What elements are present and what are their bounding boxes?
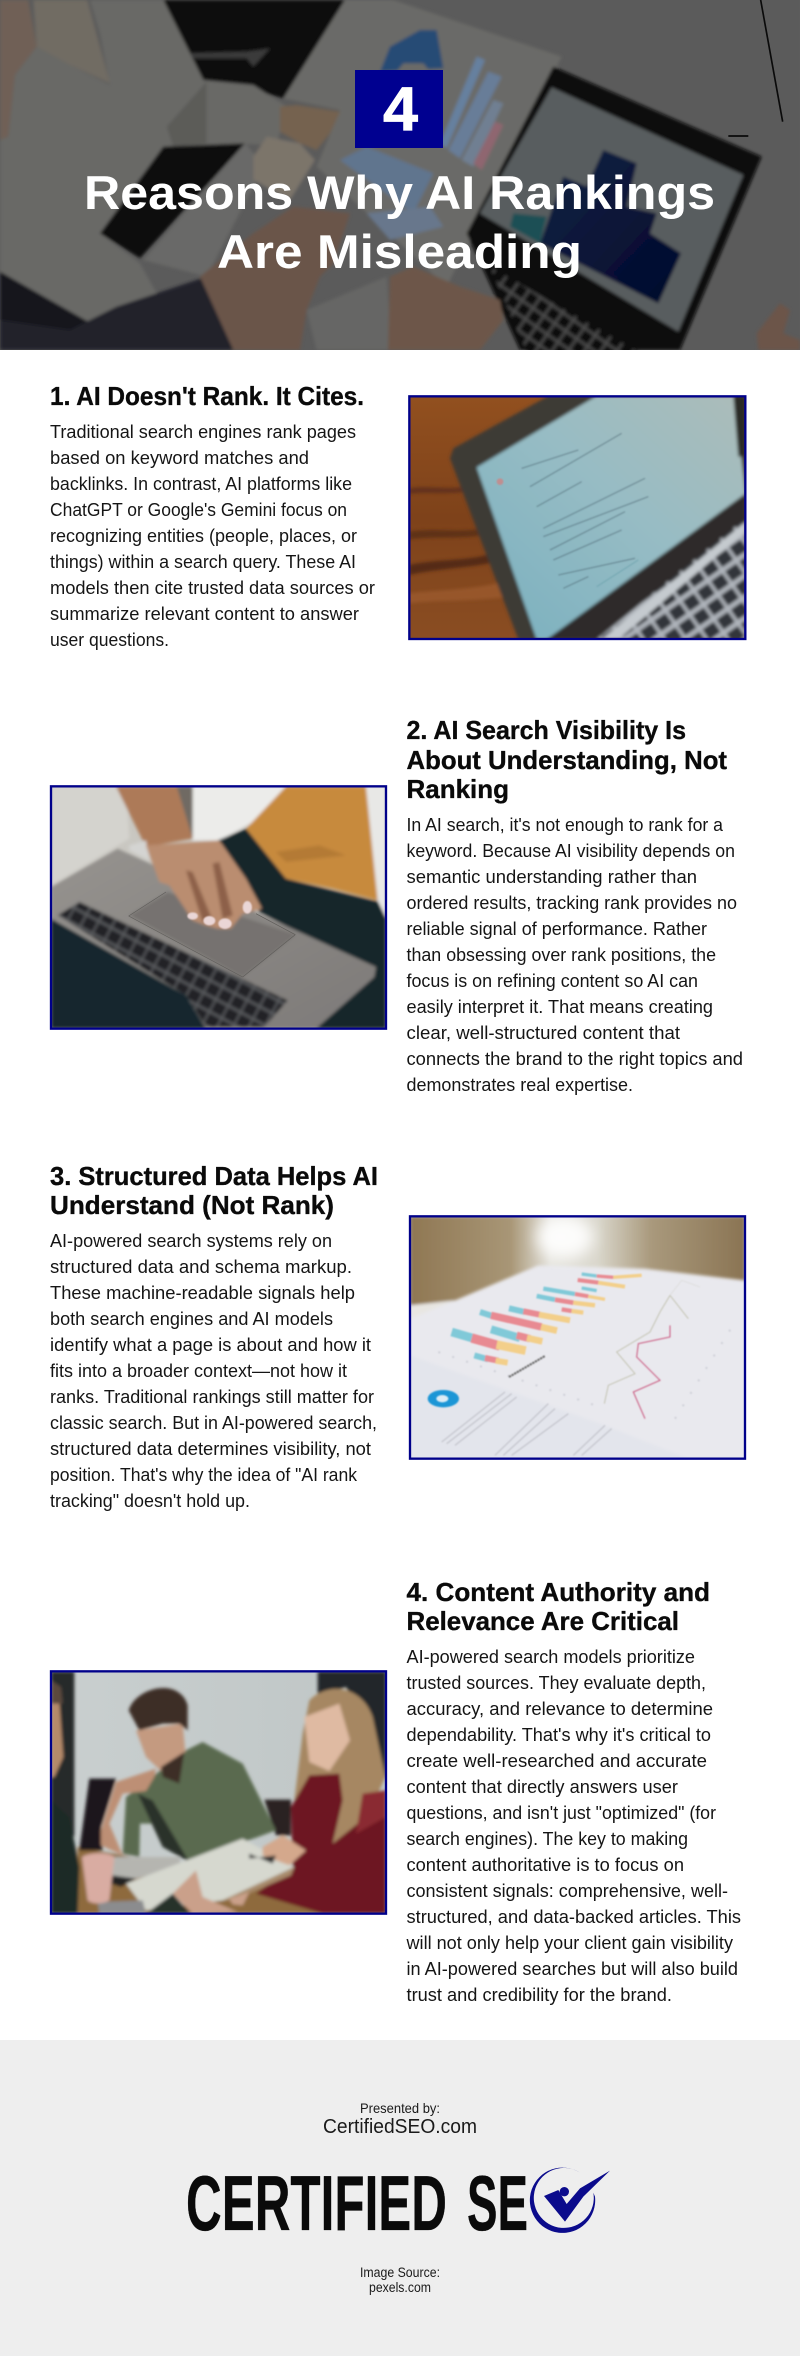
heading: reason 3: Understand (Not Rank) [50, 1190, 334, 1220]
heading: reason 4 [406, 1577, 710, 1636]
text: reason 4 body: trusted sources. They evaluate depth, [406, 1672, 706, 1693]
panel: header [0, 0, 800, 367]
panel: reason 3 [50, 1161, 745, 1511]
text: reason 4 body: consistent signals: comprehensive, well- [406, 1880, 728, 1901]
text: reason 1 body: things) within a search query. These AI [50, 551, 356, 572]
text: reason 4 body: content that directly answers user [406, 1776, 678, 1797]
heading: reason 4: 4. Content Authority and [406, 1577, 710, 1607]
text: reason 3 body: position. That's why the idea of "AI rank [50, 1464, 358, 1485]
heading: reason 1: 1. AI Doesn't Rank. It Cites. [50, 381, 364, 411]
badge: number 4: 4 [383, 75, 419, 144]
text: reason 2 body: keyword. Because AI visibility depends on [406, 840, 735, 861]
text: reason 4 body: content authoritative is to focus on [406, 1854, 684, 1875]
text: image source [360, 2265, 440, 2295]
text: reason 3 body: ranks. Traditional rankings still matter for [50, 1386, 374, 1407]
heading: reason 3 [50, 1161, 378, 1220]
text: reason 2 body: ordered results, tracking rank provides no [406, 892, 737, 913]
header photo: business team reviewing charts at a laptop [0, 0, 800, 367]
heading: reason 2: 2. AI Search Visibility Is [406, 715, 686, 745]
text: reason 2 body: reliable signal of performance. Rather [406, 918, 707, 939]
text: reason 4 body: questions, and isn't just "optimized" (for [406, 1802, 716, 1823]
text: reason 1 body: ChatGPT or Google's Gemini focus on [50, 499, 347, 520]
photo: colleagues reviewing a clipboard at a table [51, 1671, 386, 1914]
heading: reason 2: Ranking [406, 774, 509, 804]
text: reason 1 body: recognizing entities (people, places, or [50, 525, 357, 546]
text: presented by [323, 2100, 477, 2138]
text: reason 4 body: create well-researched and accurate [406, 1750, 707, 1771]
logo: Certified SEO: CERTIFIED [186, 2159, 447, 2247]
text: reason 1 body: backlinks. In contrast, AI platforms like [50, 473, 352, 494]
text: image source: Image Source: [360, 2265, 440, 2280]
photo: printed charts on a desk [410, 1215, 745, 1459]
text: reason 3 body: structured data and schema markup. [50, 1256, 352, 1277]
icon: check mark in ring [530, 2168, 610, 2233]
panel: footer [0, 2040, 800, 2356]
title: Are Misleading [217, 225, 582, 278]
text: presented by: Presented by: [360, 2100, 440, 2116]
heading: reason 2: About Understanding, Not [406, 745, 727, 775]
text: reason 4 body: in AI-powered searches but will also build [406, 1958, 738, 1979]
badge: number 4 [355, 70, 443, 148]
text: reason 1 body [50, 421, 375, 650]
photo: laptop screen on wooden desk [409, 396, 746, 639]
text: reason 1 body: Traditional search engines rank pages [50, 421, 356, 442]
text: reason 2 body: In AI search, it's not enough to rank for a [406, 814, 724, 835]
text: reason 4 body: dependability. That's why it's critical to [406, 1724, 711, 1745]
text: reason 4 body: will not only help your client gain visibility [406, 1932, 734, 1953]
text: reason 4 body: trust and credibility for the brand. [406, 1984, 672, 2005]
photo: hand on laptop trackpad [51, 786, 386, 1029]
text: reason 3 body [50, 1230, 377, 1511]
text: reason 2 body: clear, well-structured content that [406, 1022, 680, 1043]
title: Reasons Why AI Rankings [84, 166, 715, 219]
text: reason 4 body: AI-powered search models prioritize [406, 1646, 695, 1667]
text: reason 4 body: accuracy, and relevance to determine [406, 1698, 713, 1719]
heading: reason 4: Relevance Are Critical [406, 1606, 679, 1636]
text: reason 1 body: user questions. [50, 629, 169, 650]
text: reason 3 body: fits into a broader context—not how it [50, 1360, 347, 1381]
panel: reason 2 [51, 715, 743, 1095]
panel: reason 4 [51, 1577, 741, 2005]
text: reason 2 body: connects the brand to the right topics and [406, 1048, 743, 1069]
text: reason 2 body: easily interpret it. That means creating [406, 996, 713, 1017]
text: reason 3 body: identify what a page is about and how it [50, 1334, 371, 1355]
text: reason 1 body: summarize relevant content to answer [50, 603, 359, 624]
text: reason 3 body: AI-powered search systems rely on [50, 1230, 332, 1251]
logo: Certified SEO: SE [467, 2159, 528, 2247]
title [84, 166, 715, 278]
text: reason 4 body: structured, and data-backed articles. This [406, 1906, 741, 1927]
panel: reason 1 [50, 381, 746, 650]
text: reason 3 body: structured data determines visibility, not [50, 1438, 371, 1459]
text: reason 2 body: than obsessing over rank positions, the [406, 944, 716, 965]
text: reason 4 body: search engines). The key to making [406, 1828, 688, 1849]
text: reason 2 body [406, 814, 743, 1095]
text: reason 3 body: classic search. But in AI-powered search, [50, 1412, 377, 1433]
heading: reason 2 [406, 715, 727, 804]
text: reason 2 body: demonstrates real expertise. [406, 1074, 633, 1095]
text: reason 3 body: both search engines and AI models [50, 1308, 333, 1329]
text: reason 3 body: tracking" doesn't hold up. [50, 1490, 250, 1511]
text: reason 1 body: models then cite trusted data sources or [50, 577, 375, 598]
text: reason 2 body: focus is on refining content so AI can [406, 970, 698, 991]
text: reason 2 body: semantic understanding rather than [406, 866, 697, 887]
text: image source: pexels.com [369, 2280, 431, 2295]
heading: reason 3: 3. Structured Data Helps AI [50, 1161, 378, 1191]
text: reason 1 body: based on keyword matches and [50, 447, 309, 468]
text: presented by: CertifiedSEO.com [323, 2116, 477, 2138]
text: reason 4 body [406, 1646, 741, 2005]
text: reason 3 body: These machine-readable signals help [50, 1282, 355, 1303]
